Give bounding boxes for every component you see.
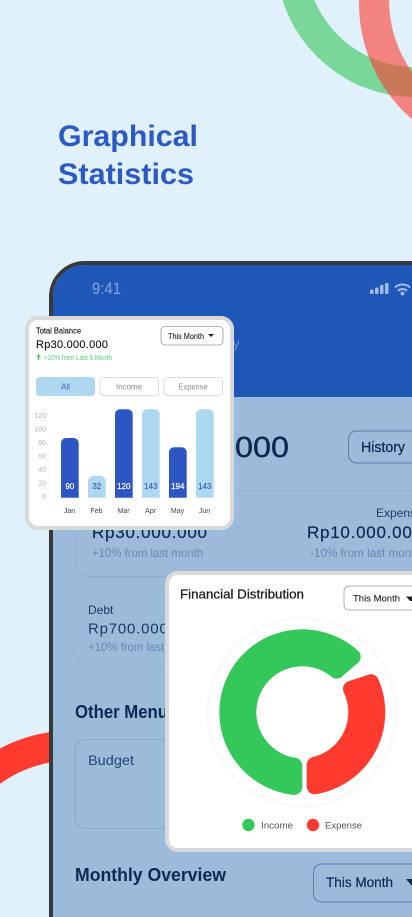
y axis labels [34,413,46,501]
bar chart: 143 [144,482,158,491]
heading: monthly overview: Monthly Overview [75,865,227,885]
bar chart: 194 [171,482,185,491]
x axis labels: Jan [64,508,75,515]
tab: expense [164,378,222,396]
x axis labels [64,508,210,515]
tab: income: Income [116,382,143,392]
bar chart [61,409,214,498]
heading: other menu: Other Menu [75,702,168,722]
legend [242,819,362,832]
decorative arc: left red [0,732,55,784]
decorative arcs: top right [282,0,412,119]
tab: income [100,378,158,396]
x axis labels: May [171,508,185,515]
period dropdown: This Month [168,332,204,341]
panel: debt card: Rp700.000.000 [88,620,200,638]
title: Graphical [58,120,198,153]
x axis labels: Feb [90,508,103,515]
icon: wifi [395,285,410,294]
tab: expense: Expense [178,382,208,392]
legend: Expense [325,820,362,832]
period dropdown [344,586,412,610]
growth note: +10% from Last 6 Month [44,355,112,362]
phone mockup [51,263,412,917]
phone frame [51,263,412,917]
period dropdown: This Month [353,594,400,604]
y axis labels: 100 [34,426,46,434]
y axis labels: 60 [38,454,46,460]
y axis labels: 40 [38,467,46,474]
y axis labels: 20 [38,480,46,488]
title [58,120,198,191]
panel: budget card [75,740,275,828]
period dropdown [161,326,223,345]
status bar time: 9:41 [92,279,121,298]
panel: debt card: +10% from last month [88,640,199,654]
header text fragment: y [233,336,240,351]
this month button: This Month [326,874,393,890]
tab: all [36,377,95,396]
income amount: Rp30.000.000 [92,523,207,542]
bar chart: 32 [92,482,102,491]
legend: Income [261,820,293,832]
card heading: Financial Distribution [180,586,304,602]
this month button [314,864,412,902]
card label: Total Balance [36,326,82,336]
panel: debt card [74,588,274,666]
panel: debt card: Debt [88,603,114,617]
icon: signal [370,283,388,294]
phone blue header [53,265,412,397]
total balance amount: 000 [235,432,289,464]
tab: all: All [61,382,70,392]
bar chart: 120 [117,482,131,491]
card amount: Rp30.000.000 [36,339,108,351]
x axis labels: Jun [199,508,210,515]
bar chart: 90 [65,482,75,491]
panel: budget card: Budget [88,752,134,768]
panel: financial distribution card [167,573,412,850]
bar chart: 143 [198,482,212,491]
y axis labels: 120 [34,413,46,420]
history button: History [361,440,406,456]
history button [348,431,412,463]
x axis labels: Apr [145,508,157,515]
x axis labels: Mar [117,508,130,515]
y axis labels: 80 [38,440,46,447]
y axis labels: 0 [42,494,46,501]
income change: +10% from last month [92,546,203,560]
panel: income and expense card [75,491,412,576]
panel: total balance card [27,318,232,528]
title: Statistics [58,158,194,191]
donut chart [206,616,398,808]
